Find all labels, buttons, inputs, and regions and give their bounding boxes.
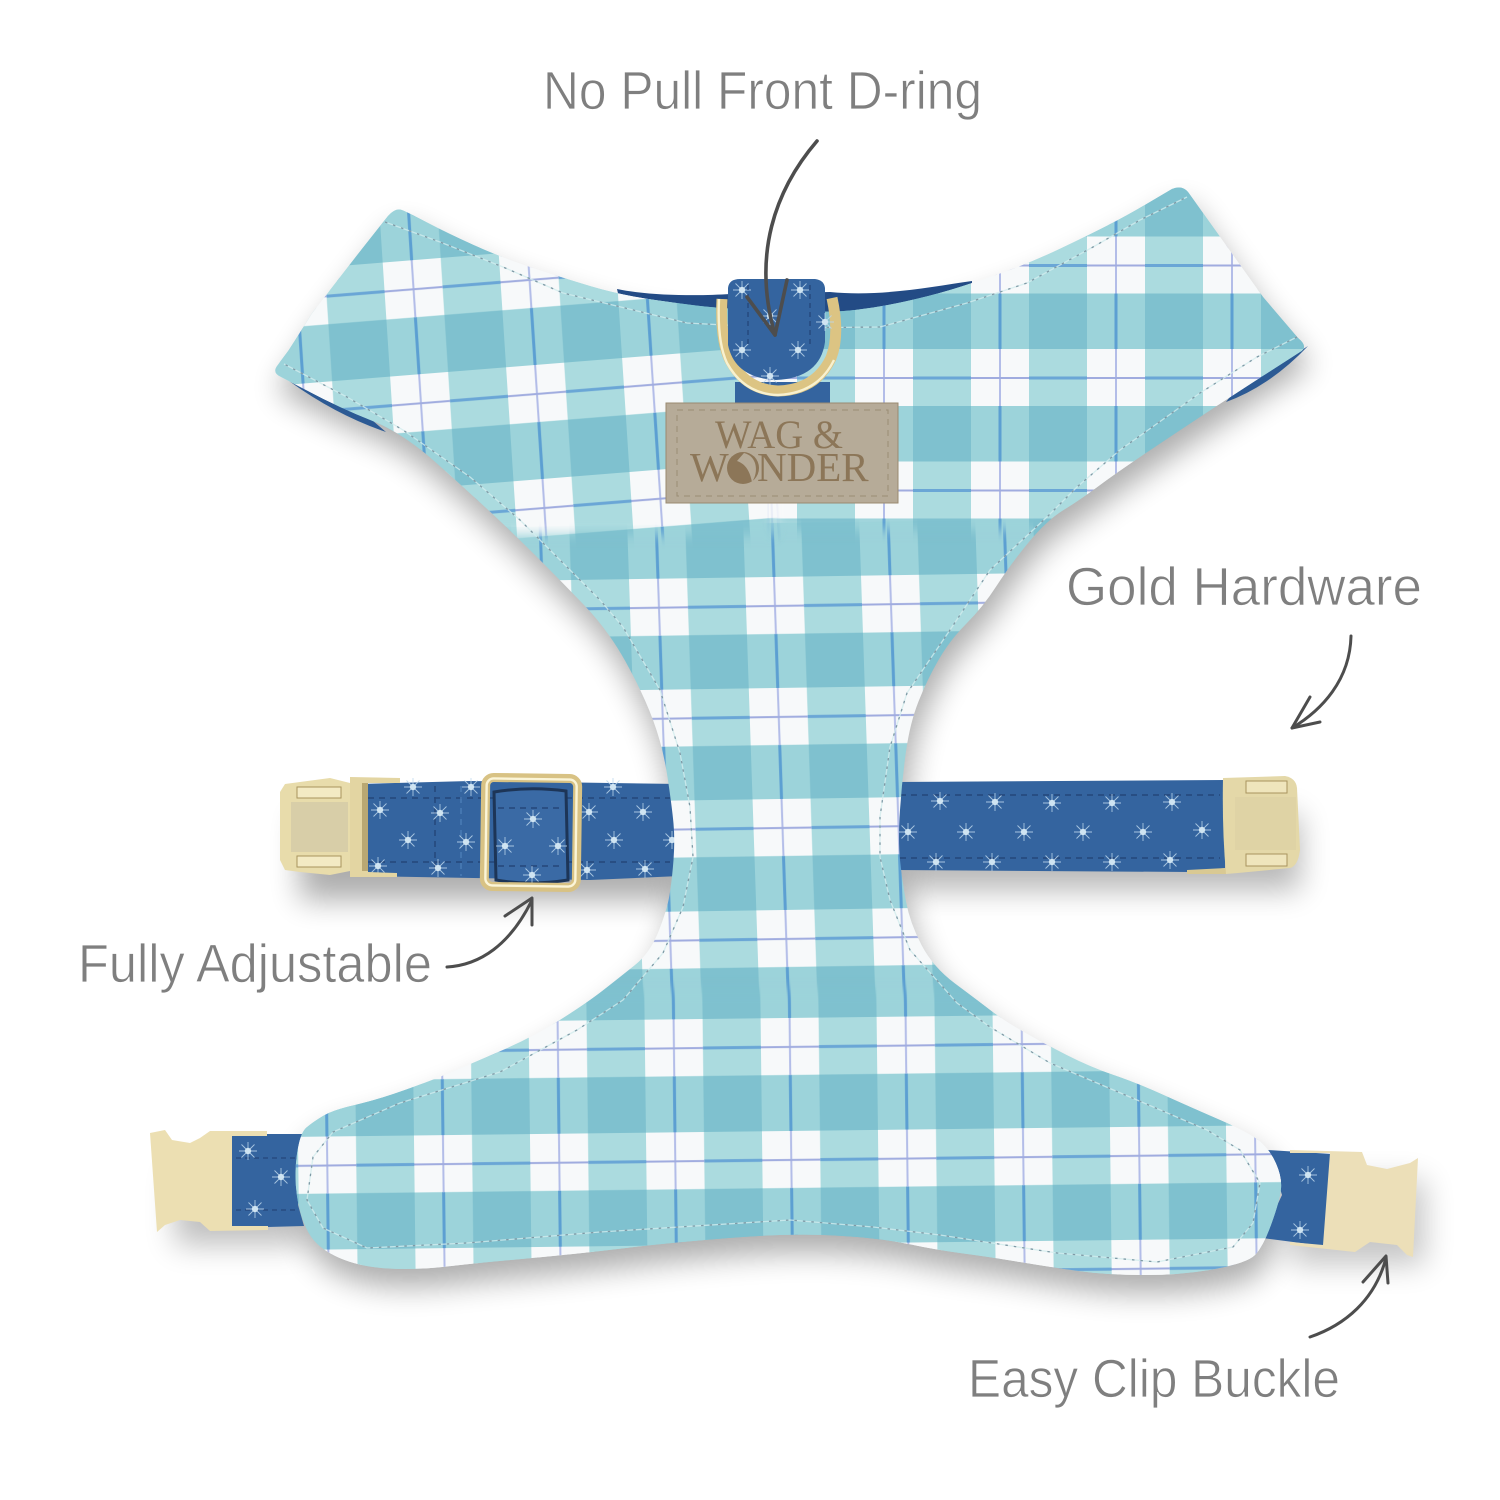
arrow: to clip buckle: [1310, 1256, 1388, 1337]
right lower strap: [1262, 1150, 1332, 1246]
lower left clip buckle: [150, 1130, 268, 1232]
brand label patch: W: [690, 444, 729, 490]
strap stars: [899, 792, 1211, 871]
arrow: to gold hardware: [1292, 636, 1351, 728]
lower right clip buckle: [1290, 1150, 1418, 1257]
brand label patch: WAG &: [715, 412, 843, 457]
right strap: [895, 780, 1225, 872]
brand label patch: [666, 403, 898, 503]
label: Fully Adjustable: Fully Adjustable: [78, 934, 432, 994]
left side-release buckle: [280, 777, 400, 877]
harness reverse side: navy lining peeking out: [277, 281, 1308, 432]
harness body with plaid: [275, 188, 1304, 1275]
soft drop shadows: [175, 206, 1425, 1293]
logo dog icon: [727, 452, 759, 484]
brand label patch: NDER: [757, 444, 869, 490]
D-ring with fabric tab: [719, 279, 836, 403]
arrow: to adjuster: [447, 898, 532, 967]
label: No Pull Front D-ring: No Pull Front D-ring: [543, 61, 982, 121]
left strap slider: [484, 777, 578, 888]
label: Gold Hardware: Gold Hardware: [1066, 557, 1422, 617]
brand label patch: O: [728, 444, 758, 490]
strap stars: [369, 778, 681, 879]
label: Easy Clip Buckle: Easy Clip Buckle: [968, 1349, 1340, 1409]
arrow: to D-ring: [747, 141, 817, 335]
tab stars: [733, 281, 834, 385]
left lower strap: [232, 1134, 304, 1228]
right side-release buckle: [1187, 776, 1300, 874]
left strap with adjuster: [360, 778, 681, 880]
stitching: [284, 197, 1297, 1262]
